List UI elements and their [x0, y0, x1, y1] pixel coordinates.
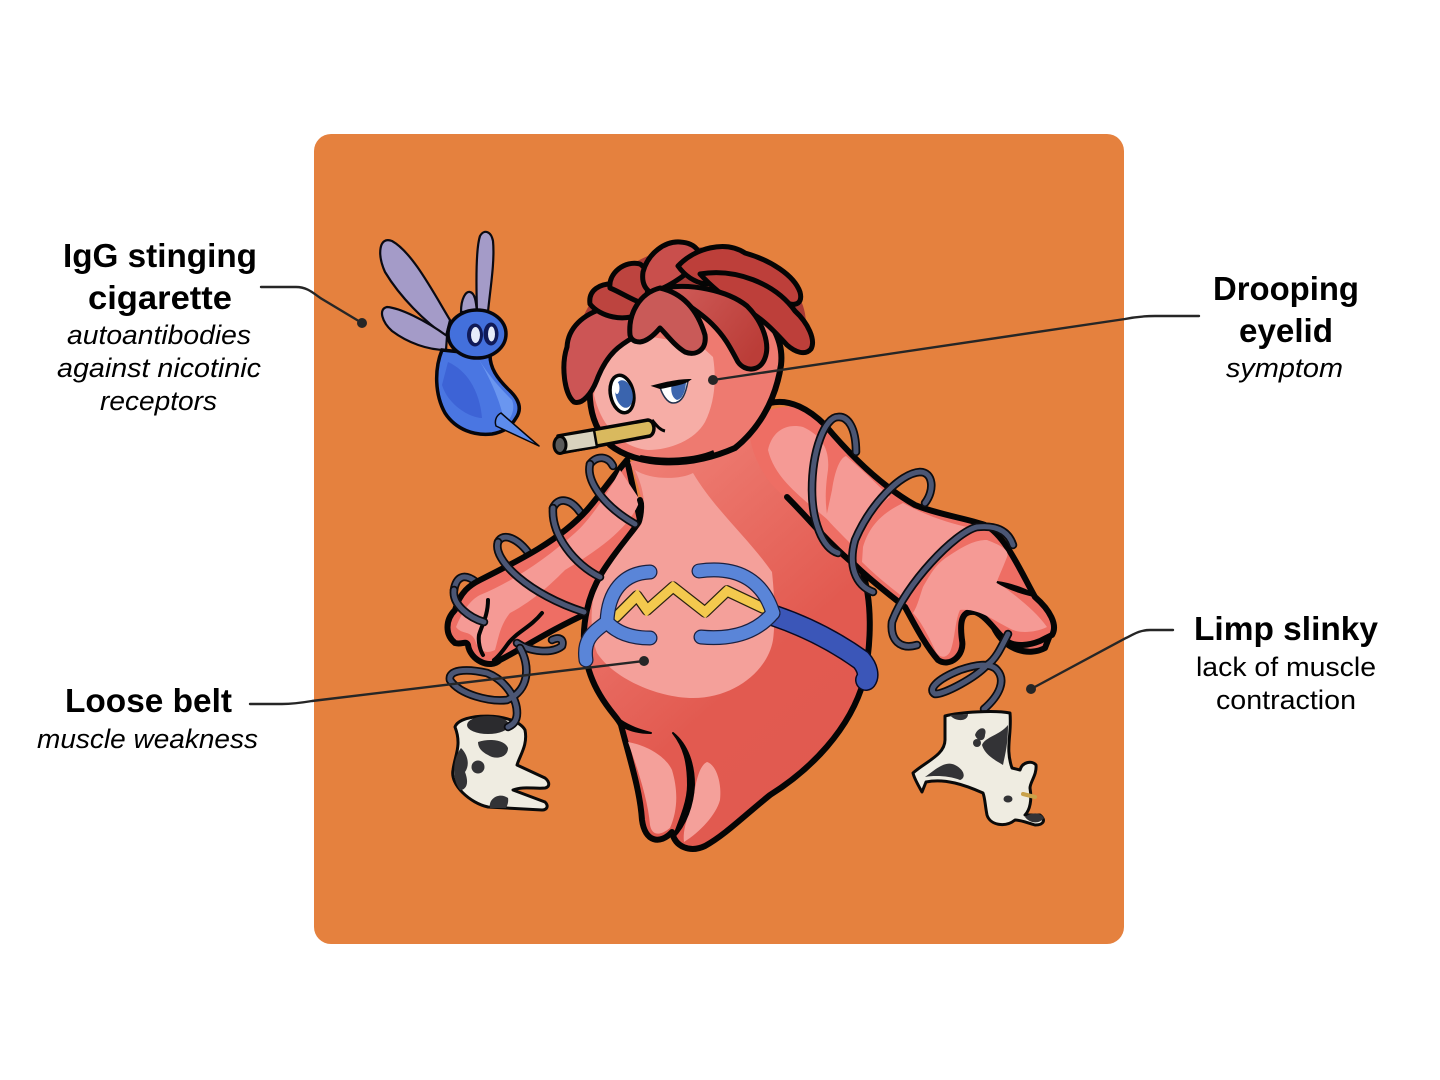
belt band — [775, 616, 868, 680]
hair base mass — [580, 247, 806, 332]
forearm highlight — [862, 503, 967, 597]
callout: Drooping eyelid: symptom — [1226, 353, 1343, 383]
left leg highlight — [628, 742, 676, 834]
leader: IgG — [261, 287, 367, 328]
antibody forks outline — [585, 570, 773, 660]
icon: left arm front coil segments — [454, 464, 635, 651]
leader: Drooping eyelid — [708, 316, 1199, 385]
callout: Limp slinky: Limp slinky — [1194, 610, 1379, 647]
mouth — [652, 420, 665, 431]
mosquito eyes — [467, 322, 498, 346]
icon: cow front half — [913, 712, 1044, 825]
icon: cigarette — [554, 420, 665, 454]
callout: IgG stinging cigarette: receptors — [100, 386, 217, 416]
cow opening — [467, 716, 509, 734]
icon: cow rear half — [453, 716, 549, 810]
elbow highlight — [826, 456, 890, 543]
callout: IgG stinging cigarette: autoantibodies — [67, 320, 251, 350]
icon: left arm — [448, 460, 640, 664]
callout: IgG stinging cigarette: cigarette — [88, 279, 232, 316]
leader: Limp slinky — [1026, 630, 1173, 694]
callout: Loose belt — [37, 656, 649, 754]
hanging right spring — [932, 634, 1008, 709]
face highlight — [594, 335, 715, 450]
icon: torso and legs — [584, 430, 870, 849]
callout: IgG stinging cigarette: IgG stinging — [63, 237, 257, 274]
icon: blue IgG mosquito — [380, 232, 539, 446]
cow spots — [454, 740, 508, 808]
callout: Limp slinky: lack of muscle — [1196, 652, 1376, 682]
cow front spots — [925, 714, 1044, 822]
little finger — [993, 626, 1052, 652]
callout: Limp slinky: contraction — [1216, 685, 1356, 715]
chest highlight — [592, 470, 774, 698]
chin crease — [640, 452, 714, 460]
icon: right arm — [749, 402, 1054, 662]
callout: Drooping eyelid: eyelid — [1239, 312, 1333, 349]
icon: loose belt with Y-shaped antibodies — [585, 570, 868, 680]
armpit crease — [787, 497, 840, 552]
torso outline — [584, 500, 870, 849]
callout: Loose belt: Loose belt — [65, 682, 232, 719]
mosquito body — [437, 350, 519, 434]
callout: Drooping eyelid: Drooping — [1213, 270, 1359, 307]
callout: IgG stinging cigarette — [57, 237, 367, 416]
drooping right eye — [654, 380, 689, 403]
icon: head — [590, 300, 781, 462]
icon: left arm back coil segments — [454, 458, 613, 590]
right leg highlight — [684, 762, 720, 842]
eyelid — [654, 380, 689, 388]
leader: Loose belt — [250, 656, 649, 704]
cow horn — [1023, 794, 1035, 797]
hand highlight — [913, 540, 1047, 657]
left hand finger creases — [479, 600, 542, 660]
callout: Limp slinky — [1026, 610, 1379, 715]
left eye — [607, 373, 637, 415]
left arm highlight — [456, 470, 640, 652]
callout: Drooping eyelid — [708, 270, 1359, 385]
mosquito stinger — [495, 413, 539, 446]
icon: hanging left spring — [450, 648, 526, 727]
callout: IgG stinging cigarette: against nicotinic — [57, 353, 262, 383]
panel: orange illustration background — [314, 134, 1124, 944]
upper arm highlight — [768, 426, 828, 520]
antibody forks fill — [585, 570, 773, 660]
icon: limp slinky right arm coils — [812, 417, 1013, 709]
hand finger crease — [997, 582, 1038, 597]
mosquito head — [448, 310, 506, 358]
yellow zigzag signal — [616, 587, 763, 617]
leg creases — [620, 720, 694, 838]
icon: hair — [564, 242, 813, 402]
mosquito wings — [380, 232, 493, 350]
callout: Loose belt: muscle weakness — [37, 724, 258, 754]
right arm outline — [770, 402, 1054, 662]
